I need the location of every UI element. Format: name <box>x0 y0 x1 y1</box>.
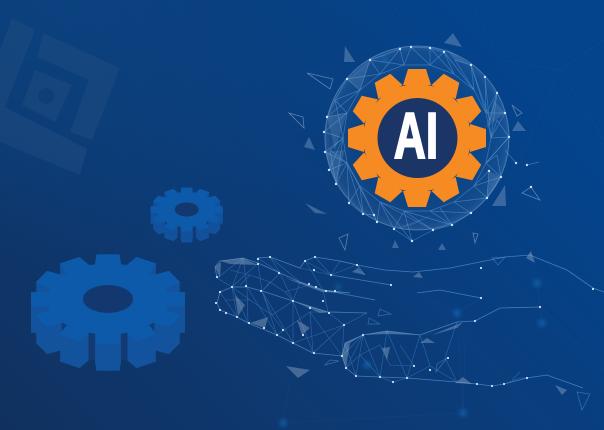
sphere nodes <box>323 46 532 242</box>
AI label: AI <box>394 100 438 172</box>
gear body <box>348 69 486 207</box>
sphere mesh <box>324 47 509 241</box>
hand nodes <box>215 256 594 387</box>
wireframe sphere <box>323 46 539 242</box>
large blue 3D gear <box>31 254 185 371</box>
hand shaded facets <box>215 251 567 395</box>
hand outline triangles <box>325 257 590 410</box>
orange AI gear <box>348 69 486 207</box>
hand outline <box>215 255 604 388</box>
sphere shaded facets <box>325 48 505 229</box>
gear hub <box>378 98 458 178</box>
logo watermark: rotated squares <box>0 18 120 175</box>
hand mesh <box>217 257 527 384</box>
wireframe hand <box>215 251 604 410</box>
floating triangles <box>289 33 540 250</box>
faint blue network nodes and lines <box>279 0 604 427</box>
small blue 3D gear <box>151 188 223 242</box>
